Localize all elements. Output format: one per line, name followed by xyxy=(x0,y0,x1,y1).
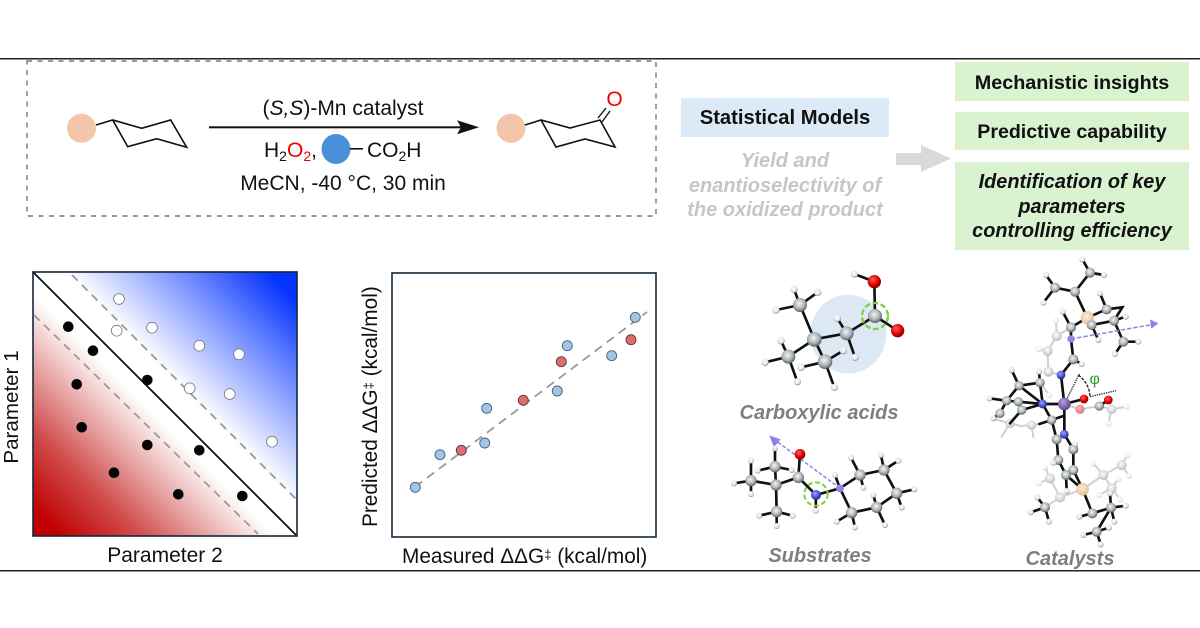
black data points xyxy=(63,321,248,501)
product: substituted cyclohexanone xyxy=(496,88,623,147)
reaction arrow xyxy=(209,120,479,134)
phi angle: φ xyxy=(1089,371,1100,388)
green reactive-site ring xyxy=(862,303,888,329)
bonds xyxy=(765,274,898,387)
atoms xyxy=(761,270,904,391)
dipole arrow xyxy=(1071,319,1158,339)
y axis label: Parameter 1 xyxy=(0,350,23,464)
label: substrates: Substrates xyxy=(768,545,872,567)
fit line xyxy=(415,312,647,487)
chart: classification map xyxy=(0,272,297,567)
output description: enantioselectivity of xyxy=(689,175,883,197)
product: substituted cyclohexanone: O xyxy=(606,88,623,111)
atoms xyxy=(986,256,1141,547)
carboxylic acid reagent: H xyxy=(406,139,421,162)
y axis label: ‡ xyxy=(361,382,376,389)
outcome: mechanistic insights xyxy=(955,62,1189,101)
chart: predicted vs measured xyxy=(359,273,656,568)
blue points xyxy=(410,312,640,492)
carboxylic acid reagent: 2 xyxy=(398,148,406,164)
green reactive-site ring xyxy=(804,482,828,506)
molecule: carboxylic acid xyxy=(761,270,904,391)
plot frame xyxy=(392,273,656,537)
carboxylic acid reagent xyxy=(322,134,421,164)
heading box xyxy=(681,98,889,137)
oxidant label: , xyxy=(311,139,317,162)
oxidant label: 2 xyxy=(279,148,287,164)
bonds xyxy=(734,448,914,527)
x axis label: Measured ΔΔG xyxy=(402,545,544,568)
outcome: predictive capability: Predictive capability xyxy=(977,121,1167,143)
arrow: models to outcomes xyxy=(896,145,951,172)
dipole arrow xyxy=(769,435,840,488)
output description: Yield and xyxy=(741,150,830,172)
panel: statistical models xyxy=(681,98,889,221)
molecule: substrate xyxy=(731,435,917,530)
dashed frame xyxy=(27,61,656,216)
x axis label: ‡ xyxy=(544,547,551,562)
panel: outcomes xyxy=(955,62,1189,250)
substrate: substituted cyclohexane xyxy=(67,114,187,147)
bonds xyxy=(989,259,1138,544)
y axis label: Predicted ΔΔG xyxy=(359,389,382,527)
oxidant label: O xyxy=(287,139,303,162)
highlight disc xyxy=(810,295,886,373)
red points xyxy=(456,335,636,455)
outcome: mechanistic insights: Mechanistic insights xyxy=(975,72,1169,94)
phi angle xyxy=(1064,371,1116,404)
x axis label: Parameter 2 xyxy=(107,544,223,567)
top rule xyxy=(0,58,1200,60)
outcome: predictive capability xyxy=(955,112,1189,150)
oxidant label: 2 xyxy=(303,148,311,164)
outcome: key parameters xyxy=(955,162,1189,250)
outcome: key parameters: controlling efficiency xyxy=(972,220,1173,242)
white data points xyxy=(111,294,277,447)
catalyst label: (S,S)-Mn catalyst xyxy=(262,97,424,120)
faded rear atoms xyxy=(992,318,1132,507)
panel: reaction scheme xyxy=(27,61,656,216)
output description: the oxidized product xyxy=(687,199,884,221)
outcome: key parameters: parameters xyxy=(1017,196,1126,218)
margin lower xyxy=(34,315,258,534)
margin upper xyxy=(72,275,296,499)
label: carboxylic acids: Carboxylic acids xyxy=(740,402,898,424)
outcome: key parameters: Identification of key xyxy=(979,171,1166,193)
label: catalysts: Catalysts xyxy=(1026,548,1114,570)
carboxylic acid reagent: CO xyxy=(367,139,398,162)
decision boundary xyxy=(33,272,296,535)
molecule: catalyst xyxy=(986,256,1158,547)
y axis label: (kcal/mol) xyxy=(359,286,382,382)
bottom rule xyxy=(0,570,1200,572)
oxidant label: H xyxy=(264,139,279,162)
conditions label: MeCN, -40 °C, 30 min xyxy=(240,172,446,195)
x axis label: (kcal/mol) xyxy=(551,545,647,568)
atoms xyxy=(731,445,917,530)
heading: Statistical Models xyxy=(700,107,870,129)
gradient field xyxy=(33,272,297,536)
